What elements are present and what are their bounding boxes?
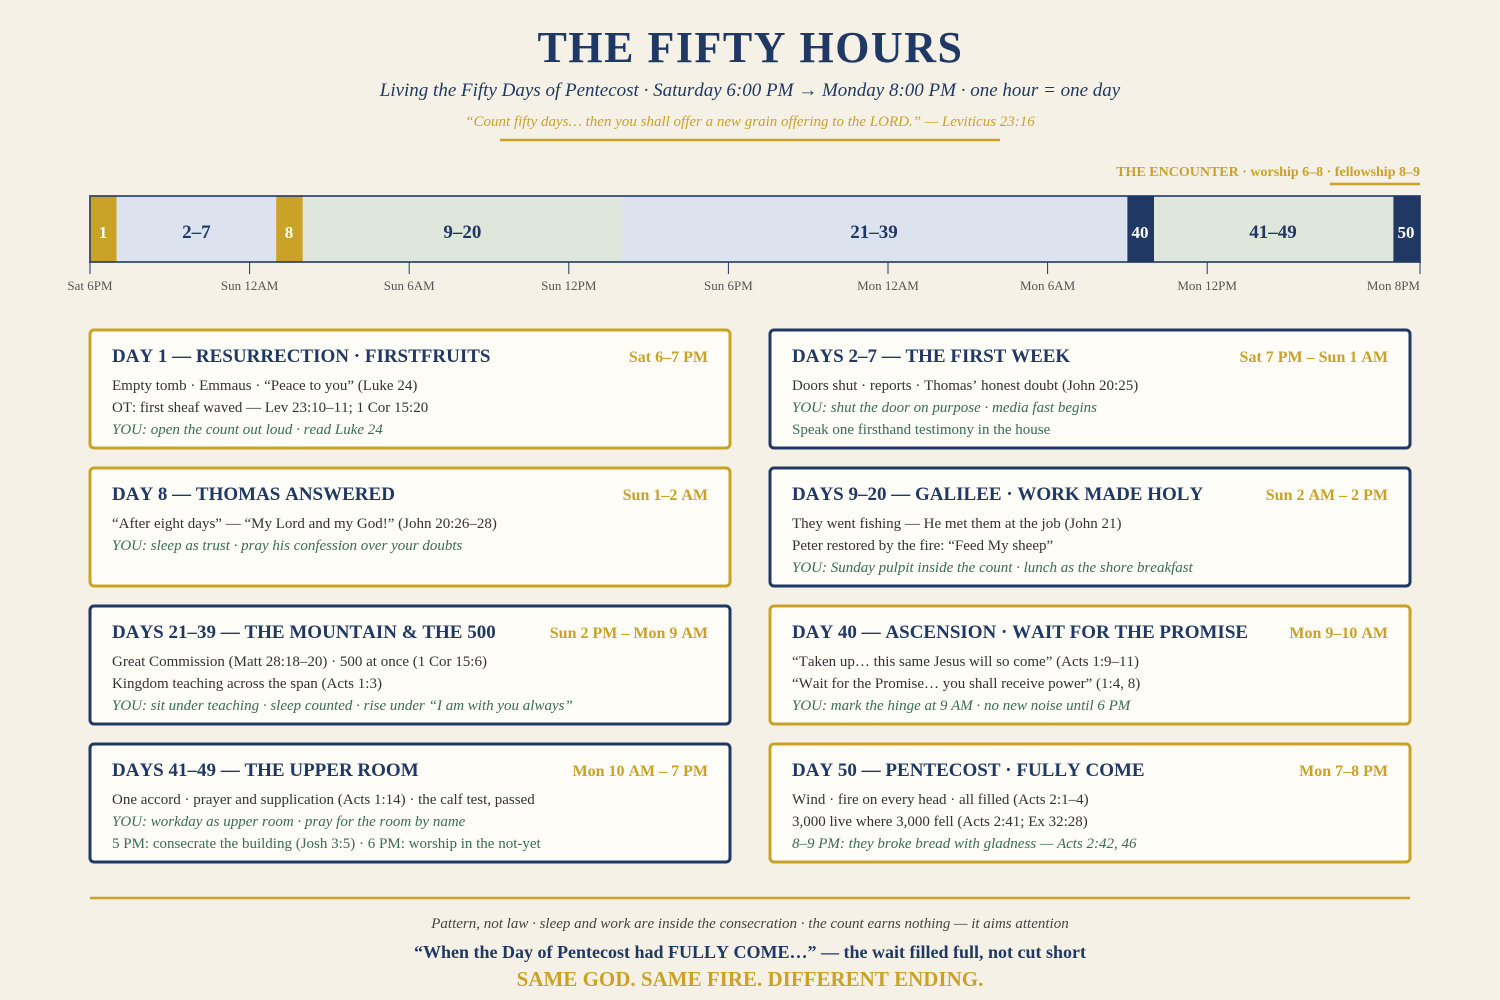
timeline bar: 50	[1397, 223, 1414, 242]
panel: day 50: 3,000 live where 3,000 fell (Acts 2:41; Ex 32:28)	[792, 814, 1088, 830]
timeline axis: Mon 12AM	[857, 278, 919, 293]
timeline bar: 1	[99, 223, 107, 242]
panel: day 50: 8–9 PM: they broke bread with gladness — Acts 2:42, 46	[792, 836, 1137, 852]
panel: days 21-39: Sun 2 PM – Mon 9 AM	[550, 625, 708, 642]
panel: day 40: “Taken up… this same Jesus will so come” (Acts 1:9–11)	[792, 654, 1139, 670]
panel: day 1: YOU: open the count out loud · read Luke 24	[112, 422, 383, 438]
panel: day 50	[768, 742, 1412, 864]
timeline axis: Sat 6PM	[67, 278, 113, 293]
subtitle: Living the Fifty Days of Pentecost · Saturday 6:00 PM → Monday 8:00 PM · one hour = one day	[380, 80, 1120, 101]
panel: days 9-20: They went fishing — He met them at the job (John 21)	[792, 516, 1122, 532]
panel: day 8: “After eight days” — “My Lord and my God!” (John 20:26–28)	[112, 516, 497, 532]
timeline axis: Mon 8PM	[1367, 278, 1420, 293]
timeline axis: Mon 12PM	[1177, 278, 1237, 293]
panel: days 9-20	[768, 466, 1412, 588]
panel: day 1: DAY 1 — RESURRECTION · FIRSTFRUITS	[112, 346, 490, 367]
panel: days 21-39	[88, 604, 732, 726]
panel: days 41-49: 5 PM: consecrate the building (Josh 3:5) · 6 PM: worship in the not-yet	[112, 836, 541, 852]
panel: day 1: OT: first sheaf waved — Lev 23:10–11; 1 Cor 15:20	[112, 400, 428, 416]
panel: days 21-39: Kingdom teaching across the span (Acts 1:3)	[112, 676, 382, 692]
panel: days 9-20: DAYS 9–20 — GALILEE · WORK MADE HOLY	[792, 484, 1203, 505]
title: THE FIFTY HOURS	[538, 23, 963, 72]
panel: days 2-7: Sat 7 PM – Sun 1 AM	[1240, 349, 1388, 366]
panel: day 40: “Wait for the Promise… you shall receive power” (1:4, 8)	[792, 676, 1140, 692]
panel: day 50: DAY 50 — PENTECOST · FULLY COME	[792, 760, 1145, 781]
panel: days 41-49: YOU: workday as upper room · pray for the room by name	[112, 814, 465, 830]
panel: day 8: DAY 8 — THOMAS ANSWERED	[112, 484, 395, 505]
timeline axis: Mon 6AM	[1020, 278, 1075, 293]
timeline axis: Sun 6AM	[384, 278, 435, 293]
panel: days 9-20: Sun 2 AM – 2 PM	[1266, 487, 1388, 504]
footer note: Pattern, not law · sleep and work are inside the consecration · the count earns nothing — it aims attention	[431, 916, 1069, 932]
panel: day 1: Sat 6–7 PM	[629, 349, 708, 366]
panel: day 40: YOU: mark the hinge at 9 AM · no new noise until 6 PM	[792, 698, 1130, 714]
panel: day 1: Empty tomb · Emmaus · “Peace to you” (Luke 24)	[112, 378, 417, 394]
panel: day 8: YOU: sleep as trust · pray his confession over your doubts	[112, 538, 462, 554]
panel: days 21-39: Great Commission (Matt 28:18–20) · 500 at once (1 Cor 15:6)	[112, 654, 487, 670]
timeline bar: 8	[285, 223, 293, 242]
panel: days 2-7: Speak one firsthand testimony in the house	[792, 422, 1050, 438]
panel: days 2-7: Doors shut · reports · Thomas’ honest doubt (John 20:25)	[792, 378, 1138, 394]
timeline bar: 40	[1131, 223, 1148, 242]
panel: days 2-7	[768, 328, 1412, 450]
timeline axis	[67, 262, 1420, 293]
timeline bar: 21–39	[850, 222, 898, 243]
timeline bar: 41–49	[1249, 222, 1297, 243]
panel: days 21-39: YOU: sit under teaching · sleep counted · rise under “I am with you always”	[112, 698, 573, 714]
closing line: SAME GOD. SAME FIRE. DIFFERENT ENDING.	[517, 967, 983, 991]
panel: day 8: Sun 1–2 AM	[623, 487, 708, 504]
panel: days 41-49: One accord · prayer and supplication (Acts 1:14) · the calf test, passed	[112, 792, 535, 808]
timeline bar	[89, 195, 1421, 263]
panel: days 2-7: DAYS 2–7 — THE FIRST WEEK	[792, 346, 1070, 367]
panel: days 41-49: Mon 10 AM – 7 PM	[572, 763, 708, 780]
timeline axis: Sun 12PM	[541, 278, 596, 293]
panel: days 41-49: DAYS 41–49 — THE UPPER ROOM	[112, 760, 419, 781]
panel: days 21-39: DAYS 21–39 — THE MOUNTAIN & THE 500	[112, 622, 496, 643]
panel: day 8	[88, 466, 732, 588]
footer quote: “When the Day of Pentecost had FULLY COME…” — the wait filled full, not cut short	[414, 942, 1086, 962]
panel: day 40	[768, 604, 1412, 726]
scripture quote: “Count fifty days… then you shall offer a new grain offering to the LORD.” — Leviticus 23:16	[465, 114, 1035, 130]
timeline axis: Sun 12AM	[221, 278, 278, 293]
encounter label: THE ENCOUNTER · worship 6–8 · fellowship 8–9	[1116, 165, 1420, 180]
timeline bar: 9–20	[443, 222, 481, 243]
panel: days 9-20: YOU: Sunday pulpit inside the count · lunch as the shore breakfast	[792, 560, 1193, 576]
panel: day 40: DAY 40 — ASCENSION · WAIT FOR THE PROMISE	[792, 622, 1248, 643]
panel: days 41-49	[88, 742, 732, 864]
panel: day 50: Wind · fire on every head · all filled (Acts 2:1–4)	[792, 792, 1089, 808]
timeline axis: Sun 6PM	[704, 278, 753, 293]
panel: day 40: Mon 9–10 AM	[1289, 625, 1388, 642]
panel: days 9-20: Peter restored by the fire: “Feed My sheep”	[792, 538, 1053, 554]
panel: days 2-7: YOU: shut the door on purpose · media fast begins	[792, 400, 1097, 416]
panel: day 50: Mon 7–8 PM	[1299, 763, 1388, 780]
timeline bar: 2–7	[182, 222, 211, 243]
panel: day 1	[88, 328, 732, 450]
